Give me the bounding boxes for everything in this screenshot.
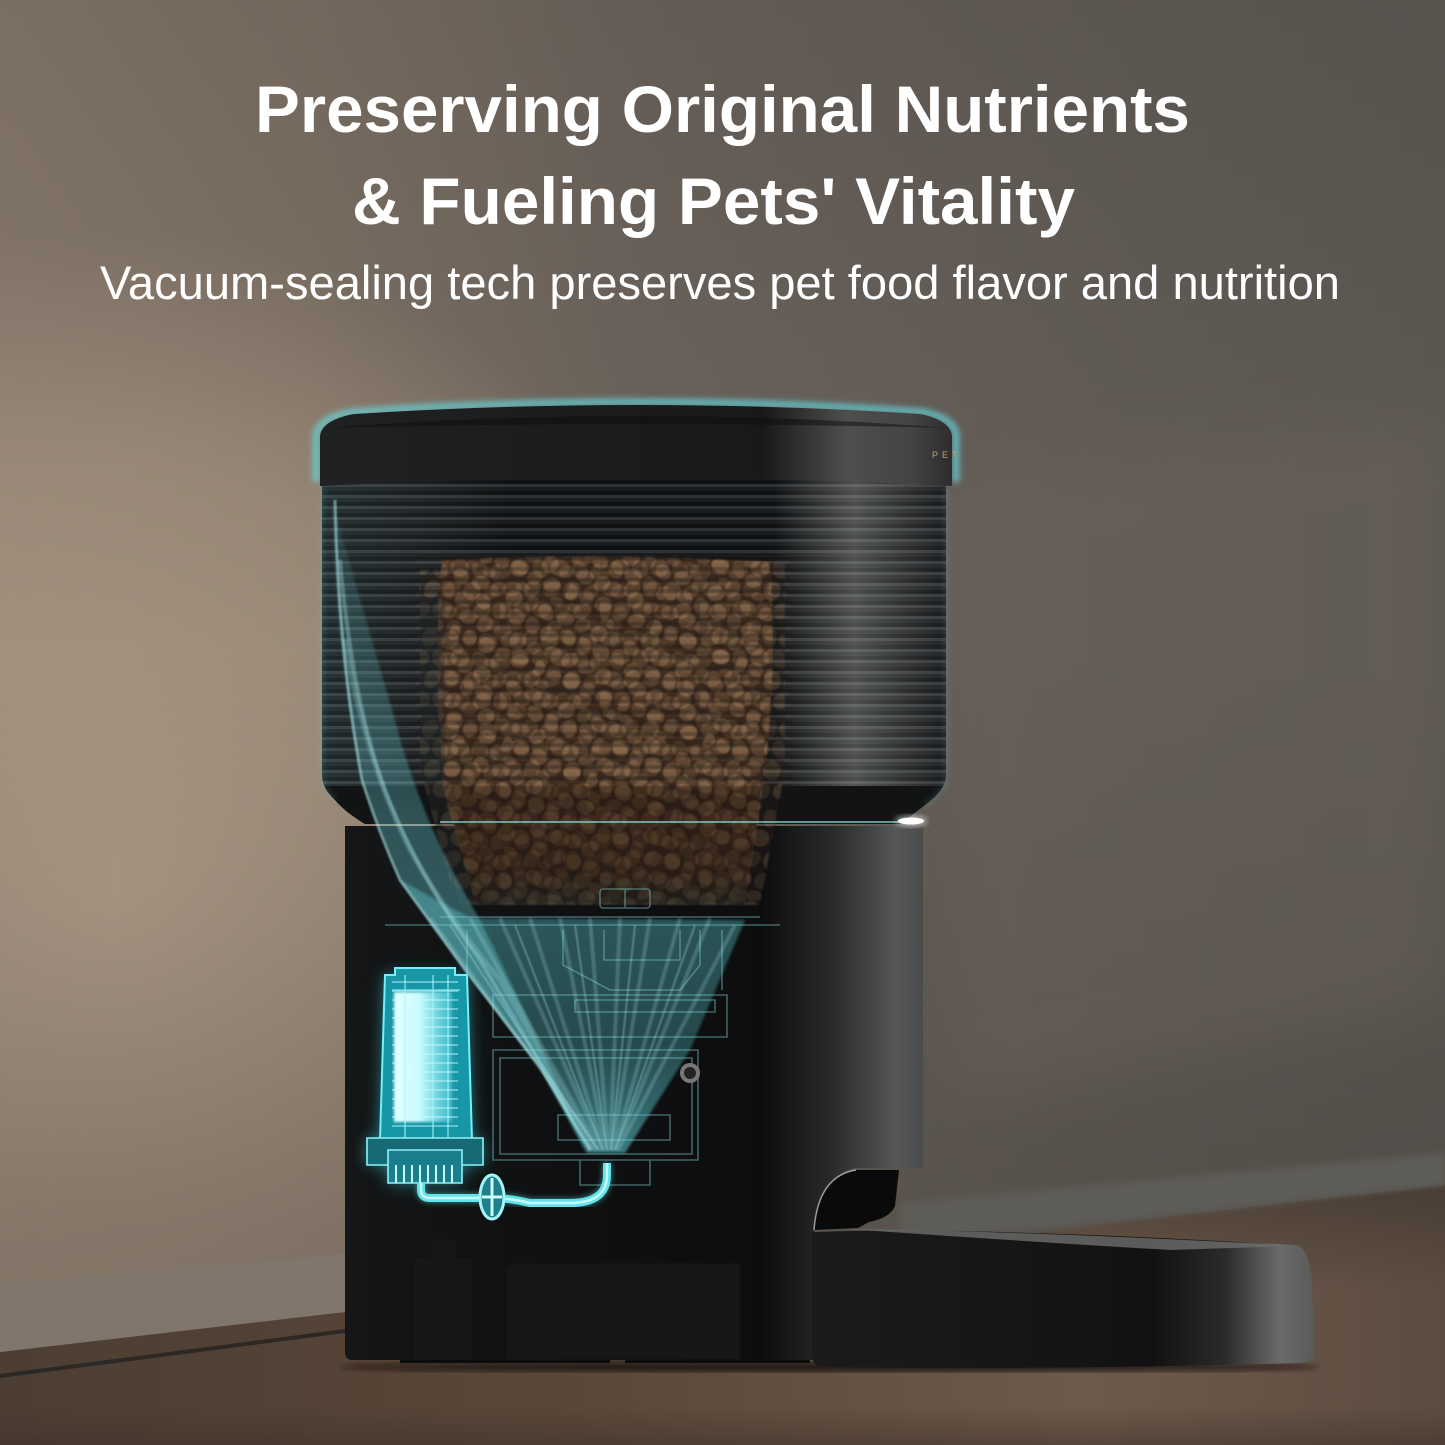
food kibble window bbox=[415, 556, 790, 905]
lid with cyan glow bbox=[316, 402, 956, 486]
dispenser chute bbox=[814, 1170, 899, 1230]
chute highlight bbox=[814, 1170, 856, 1230]
power cable bbox=[0, 1331, 345, 1376]
brand mark on lid: PET bbox=[932, 450, 962, 460]
subtitle: Vacuum-sealing tech preserves pet food flavor and nutrition bbox=[100, 256, 1340, 309]
screw bbox=[682, 1065, 698, 1081]
title bbox=[255, 72, 1190, 238]
title: & Fueling Pets' Vitality bbox=[352, 164, 1075, 238]
feeder base body bbox=[345, 826, 923, 1360]
floor bbox=[0, 1185, 1445, 1445]
hopper side glow bbox=[322, 486, 946, 805]
bowl rim highlight bbox=[848, 1229, 1296, 1250]
food bowl bbox=[812, 1231, 1314, 1368]
status light bbox=[895, 815, 927, 827]
device shadow bbox=[340, 1362, 1320, 1372]
internal mechanism outline bbox=[385, 889, 780, 1185]
baseboard: right bbox=[899, 1153, 1445, 1240]
baseboard: left bbox=[0, 1254, 345, 1352]
vacuum airflow fan bbox=[332, 500, 745, 1153]
floor shading bbox=[0, 1185, 1445, 1445]
vacuum filter bbox=[367, 968, 483, 1183]
base bottom internals bbox=[413, 1240, 740, 1360]
hopper ribbed body bbox=[322, 476, 948, 826]
hopper bottom seam bbox=[440, 821, 900, 823]
vacuum tube bbox=[421, 1163, 607, 1219]
title: Preserving Original Nutrients bbox=[255, 72, 1190, 146]
feeder feet bbox=[400, 1360, 810, 1363]
pet feeder bbox=[316, 402, 1314, 1368]
